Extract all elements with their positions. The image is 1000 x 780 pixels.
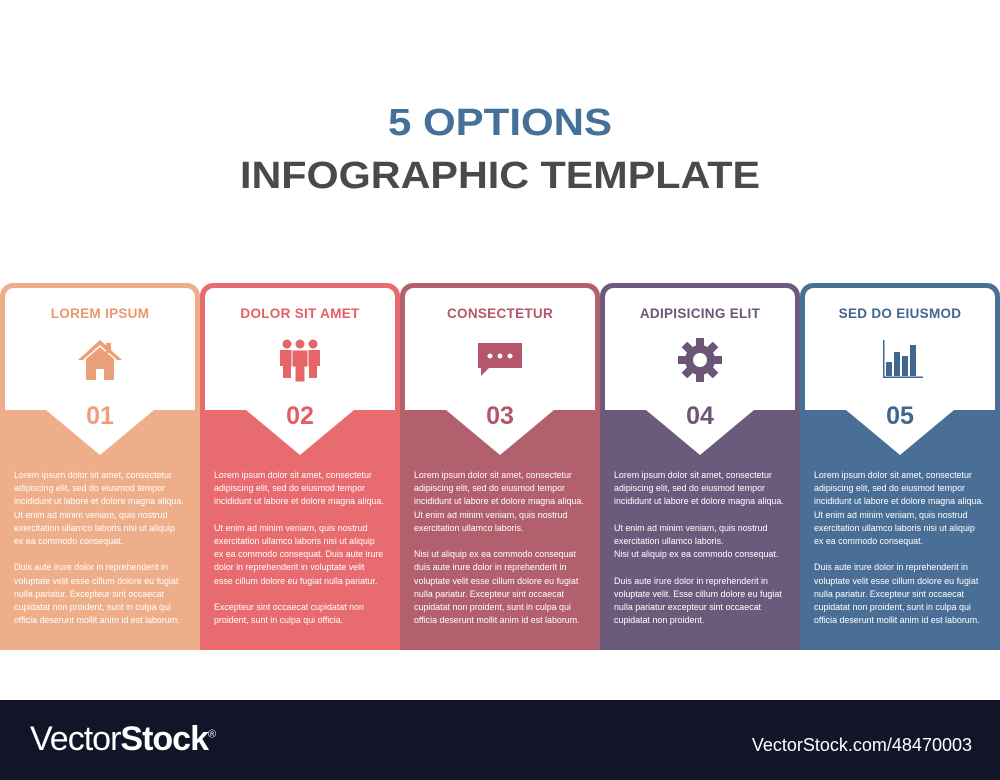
text block 04: Duis aute irure dolor in reprehenderit in <box>614 576 768 586</box>
title <box>240 102 760 197</box>
text block 03: adipiscing elit, sed do eiusmod tempor <box>414 483 565 493</box>
text block 03: cupidatat non proident, sunt in culpa qui <box>414 602 571 612</box>
text block 03: incididunt ut labore et dolore magna aliqua. <box>414 496 584 506</box>
text block 02: exercitation ullamco laboris nisi ut aliquip <box>214 536 375 546</box>
text block 03: duis aute irure dolor in reprehenderit in <box>414 562 566 572</box>
text block 02: Ut enim ad minim veniam, quis nostrud <box>214 523 367 533</box>
text block 01: officia deserunt mollit anim id est laborum. <box>14 615 180 625</box>
text block 05: exercitation ullamco laboris nisi ut aliquip <box>814 523 975 533</box>
heading 04: ADIPISICING ELIT <box>640 306 760 321</box>
text block 02: Lorem ipsum dolor sit amet, consectetur <box>214 470 372 480</box>
text block 01: adipiscing elit, sed do eiusmod tempor <box>14 483 165 493</box>
text block 03: exercitation ullamco laboris. <box>414 523 524 533</box>
text block 01: exercitation ullamco laboris nisi ut aliquip <box>14 523 175 533</box>
number 04: 04 <box>686 402 714 430</box>
panel: option 03 <box>400 283 600 650</box>
text block 01: Lorem ipsum dolor sit amet, consectetur <box>14 470 172 480</box>
text block 03: Nisi ut aliquip ex ea commodo consequat <box>414 549 576 559</box>
text block 04: voluptate velit. Esse cillum dolore eu fugiat <box>614 589 782 599</box>
number 02: 02 <box>286 402 314 430</box>
number 05: 05 <box>886 402 914 430</box>
pointer <box>446 410 554 455</box>
heading 02: DOLOR SIT AMET <box>240 306 360 321</box>
text block 04: nulla pariatur excepteur sint occaecat <box>614 602 761 612</box>
text block 01: incididunt ut labore et dolore magna aliqua. <box>14 496 184 506</box>
text block 04: Lorem ipsum dolor sit amet, consectetur <box>614 470 772 480</box>
footer <box>0 700 1000 780</box>
pointer <box>46 410 154 455</box>
heading 05: SED DO EIUSMOD <box>839 306 961 321</box>
text block 05: nulla pariatur. Excepteur sint occaecat <box>814 589 964 599</box>
text block 05: officia deserunt mollit anim id est laborum. <box>814 615 980 625</box>
text block 05 <box>814 470 984 625</box>
pointer <box>246 410 354 455</box>
icon: house <box>78 340 122 380</box>
text block 01: Duis aute irure dolor in reprehenderit in <box>14 562 168 572</box>
text block 03: nulla pariatur. Excepteur sint occaecat <box>414 589 564 599</box>
pointer <box>846 410 954 455</box>
text block 05: Duis aute irure dolor in reprehenderit in <box>814 562 968 572</box>
footer url: VectorStock.com/48470003 <box>752 735 972 755</box>
icon: chat bubble <box>478 343 522 376</box>
icon: people <box>280 340 320 382</box>
text block 01 <box>14 470 184 625</box>
text block 05: cupidatat non proident, sunt in culpa qui <box>814 602 971 612</box>
text block 02: incididunt ut labore et dolore magna aliqua. <box>214 496 384 506</box>
panel: option 04 <box>600 283 800 650</box>
text block 01: nulla pariatur. Excepteur sint occaecat <box>14 589 164 599</box>
panel: option 05 <box>800 283 1000 650</box>
icon: gear <box>678 338 722 382</box>
text block 04 <box>614 470 784 625</box>
text block 02: adipiscing elit, sed do eiusmod tempor <box>214 483 365 493</box>
text block 01: cupidatat non proident, sunt in culpa qui <box>14 602 171 612</box>
text block 04: exercitation ullamco laboris. <box>614 536 724 546</box>
text block 03: voluptate velit esse cillum dolore eu fugiat <box>414 576 578 586</box>
text block 01: ex ea commodo consequat. <box>14 536 123 546</box>
heading 03: CONSECTETUR <box>447 306 553 321</box>
text block 05: Ut enim ad minim veniam, quis nostrud <box>814 510 967 520</box>
text block 03: officia deserunt mollit anim id est laborum. <box>414 615 580 625</box>
number 03: 03 <box>486 402 514 430</box>
heading 01: LOREM IPSUM <box>51 306 149 321</box>
text block 05: voluptate velit esse cillum dolore eu fugiat <box>814 576 978 586</box>
text block 02: esse cillum dolore eu fugiat nulla pariatur. <box>214 576 377 586</box>
title: INFOGRAPHIC TEMPLATE <box>240 155 760 197</box>
text block 01: Ut enim ad minim veniam, quis nostrud <box>14 510 167 520</box>
text block 02: dolor in reprehenderit in voluptate velit <box>214 562 364 572</box>
text block 04: cupidatat non proident. <box>614 615 704 625</box>
text block 02: Excepteur sint occaecat cupidatat non <box>214 602 364 612</box>
panel: option 01 <box>0 283 200 650</box>
text block 05: incididunt ut labore et dolore magna aliqua. <box>814 496 984 506</box>
text block 03: Lorem ipsum dolor sit amet, consectetur <box>414 470 572 480</box>
text block 02: ex ea commodo consequat. Duis aute irure <box>214 549 383 559</box>
number 01: 01 <box>86 402 114 430</box>
text block 03 <box>414 470 584 625</box>
text block 02: proident, sunt in culpa qui officia. <box>214 615 343 625</box>
text block 05: ex ea commodo consequat. <box>814 536 923 546</box>
footer logo: VectorStock® <box>30 720 215 758</box>
text block 02 <box>214 470 384 625</box>
text block 04: Nisi ut aliquip ex ea commodo consequat. <box>614 549 778 559</box>
text block 03: Ut enim ad minim veniam, quis nostrud <box>414 510 567 520</box>
icon: bar chart <box>883 340 923 378</box>
text block 01: voluptate velit esse cillum dolore eu fugiat <box>14 576 178 586</box>
pointer <box>646 410 754 455</box>
text block 04: incididunt ut labore et dolore magna aliqua. <box>614 496 784 506</box>
text block 05: Lorem ipsum dolor sit amet, consectetur <box>814 470 972 480</box>
title: 5 OPTIONS <box>388 102 612 144</box>
text block 04: adipiscing elit, sed do eiusmod tempor <box>614 483 765 493</box>
text block 04: Ut enim ad minim veniam, quis nostrud <box>614 523 767 533</box>
panel: option 02 <box>200 283 400 650</box>
text block 05: adipiscing elit, sed do eiusmod tempor <box>814 483 965 493</box>
